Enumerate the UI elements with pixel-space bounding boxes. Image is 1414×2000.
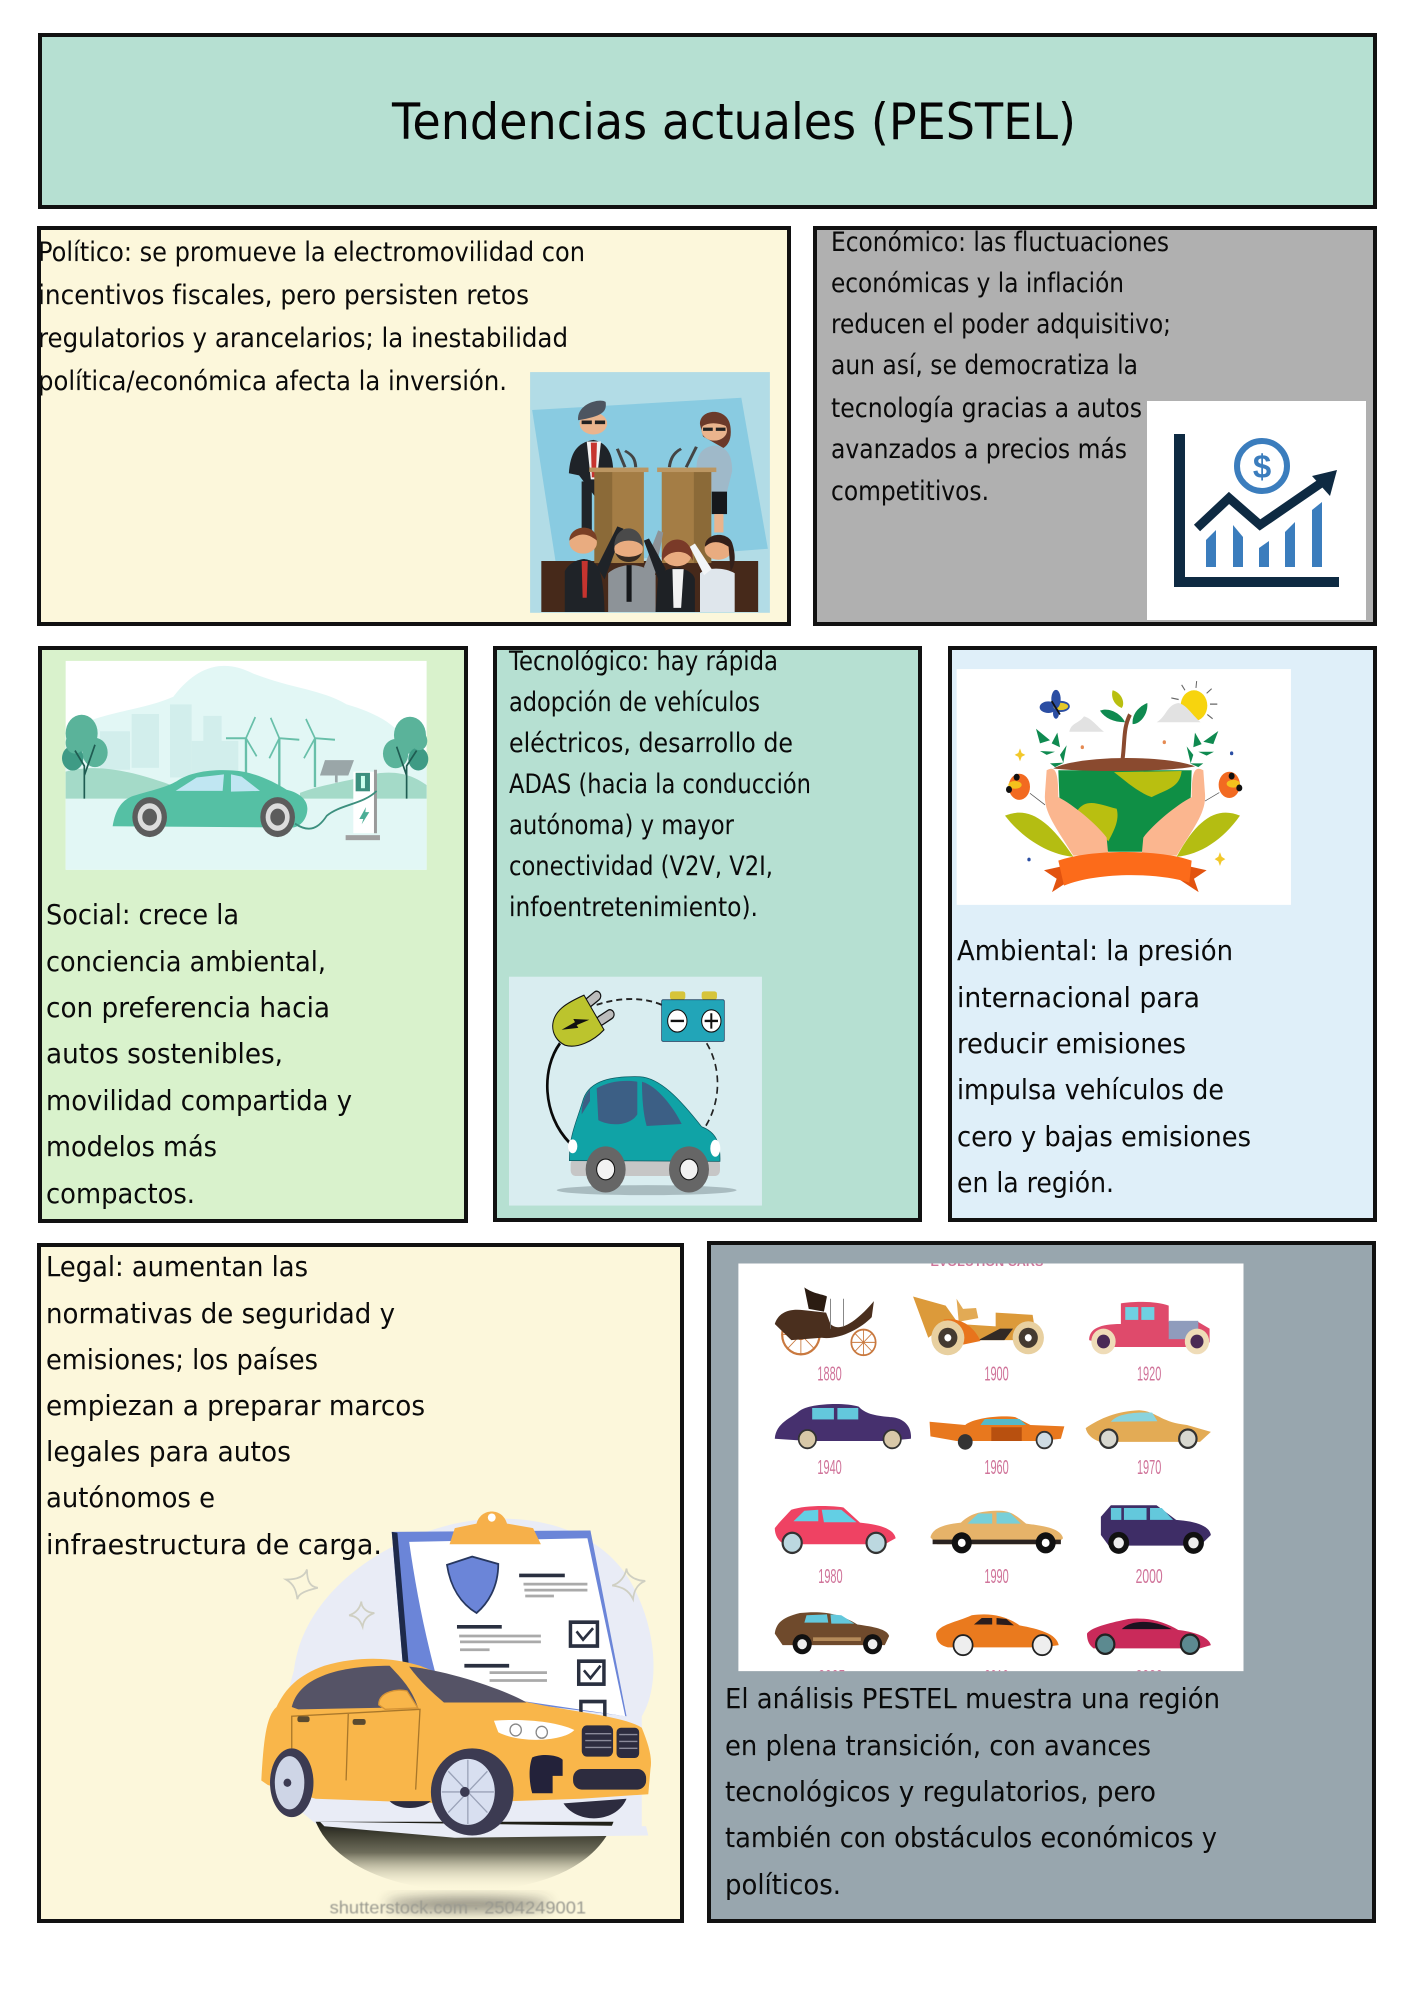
hands [1045,769,1108,856]
text: ambiental: en la región. [957,1166,1114,1199]
branches [1036,729,1218,767]
text: tecnológico: conectividad (V2V, V2I, [509,851,773,882]
woman speaker [696,412,732,532]
year labels: 2020 [1136,1667,1163,1689]
text: social: autos sostenibles, [46,1037,283,1070]
text: legal: Legal: aumentan las [46,1250,308,1283]
text: político: regulatorios y arancelarios; la inestabilidad [38,323,568,354]
text: legal: infraestructura de carga. [46,1528,382,1561]
panel: ambiental [950,648,1375,1220]
car 1920 [1089,1302,1210,1354]
illustration: evolution of cars [738,1256,1244,1689]
podiums [589,447,716,563]
watermark: shutterstock.com · 2504249001 [330,1898,586,1918]
illustration: politicians at podiums [530,372,770,613]
text: social: Social: crece la [46,898,239,931]
year labels: 1980 [818,1566,843,1588]
car [557,1077,737,1195]
butterfly [1040,690,1069,719]
plug [553,995,610,1046]
headlight and grille [494,1720,574,1740]
panel: económico [815,227,1375,624]
icon: growth chart with dollar coin: $ [1253,448,1271,485]
text: tecnológico: autónoma) y mayor [509,810,735,841]
text: tecnológico: adopción de vehículos [509,687,760,718]
lavender blob [263,1519,654,1835]
year labels: 2000 [1136,1566,1163,1588]
illustration: hands holding the earth [957,669,1291,905]
text: social: movilidad compartida y [46,1084,352,1117]
text: conclusión: en plena transición, con avances [725,1729,1151,1762]
text: tecnológico: eléctricos, desarrollo de [509,728,793,759]
panel: conclusión [709,1243,1374,1921]
year labels [817,1363,1163,1689]
text: social: con preferencia hacia [46,991,330,1024]
battery [662,991,724,1041]
text: social [46,898,352,1210]
car 2000 [1101,1505,1211,1554]
text: conclusión: tecnológicos y regulatorios, pero [725,1775,1156,1808]
text: tecnológico: infoentretenimiento). [509,892,758,923]
panel: tecnológico [495,646,920,1220]
year labels: 2005 [818,1667,845,1689]
year labels: 1920 [1137,1363,1161,1386]
text: legal: autónomos e [46,1481,215,1514]
illustration: plug, battery and electric car [509,977,762,1206]
text: conclusión: políticos. [725,1868,841,1901]
shadow [316,1822,614,1891]
text: económico: avanzados a precios más [831,434,1127,465]
text: conclusión [725,1682,1220,1901]
year labels: 1960 [984,1457,1009,1479]
illustration: checklist and yellow car [261,1512,654,1918]
charging station [295,770,380,840]
car 1900 [913,1297,1044,1355]
text: tecnológico: ADAS (hacia la conducción [509,769,811,800]
text: social: modelos más [46,1130,217,1163]
sparkles [286,1569,645,1627]
text: legal [46,1250,425,1561]
car 1940 [775,1404,911,1448]
text: político [38,237,585,397]
text: económico: económicas y la inflación [831,268,1124,299]
panel: político [38,228,789,624]
crowd [565,526,735,612]
flowers [1006,772,1242,805]
text: social: conciencia ambiental, [46,945,326,978]
text: económico: tecnología gracias a autos [831,393,1142,424]
text: legal: legales para autos [46,1435,291,1468]
text: económico: Económico: las fluctuaciones [831,227,1169,258]
car 2020 [1087,1618,1211,1654]
year labels: 1970 [1137,1457,1161,1479]
text: legal: emisiones; los países [46,1343,318,1376]
year labels: 1880 [817,1363,842,1386]
year labels: 1900 [984,1363,1009,1386]
car 1990 [930,1511,1063,1553]
text: social: compactos. [46,1177,195,1210]
sapling [1100,690,1147,759]
car [113,770,307,837]
year labels: 2010 [984,1667,1009,1689]
big leaves [1005,813,1240,857]
car 1970 [1086,1410,1211,1448]
title: Tendencias actuales (PESTEL) [391,93,1076,151]
text: conclusión: El análisis PESTEL muestra una región [725,1682,1220,1715]
text: tecnológico: Tecnológico: hay rápida [508,646,778,677]
text: económico: reducen el poder adquisitivo; [831,309,1171,340]
car 2010 [936,1614,1059,1655]
globe [1058,770,1192,852]
text: político: Político: se promueve la electromovilidad con [38,237,585,268]
clipboard [392,1512,627,1720]
car 1880 [775,1287,876,1355]
text: ambiental: Ambiental: la presión [957,934,1233,967]
year labels: 1940 [817,1457,842,1479]
ribbon [1044,852,1207,892]
icon: growth chart with dollar coin [1147,401,1366,620]
sun and clouds [1069,681,1217,732]
sparkles [1015,748,1225,866]
text: ambiental: impulsa vehículos de [957,1073,1224,1106]
car 1980 [775,1506,896,1553]
panel: legal [39,1245,682,1921]
text: ambiental [957,934,1251,1199]
text: ambiental: internacional para [957,981,1200,1014]
man speaker [569,401,613,530]
wind turbines [226,717,335,787]
car 1960 [930,1416,1064,1450]
panel: social [40,648,466,1221]
illustration: electric car charging [62,661,428,870]
text: ambiental: reducir emisiones [957,1027,1186,1060]
panel: title [40,35,1376,207]
text: económico: competitivos. [831,476,989,507]
under car ground [320,1822,648,1838]
car 2005 [775,1612,889,1654]
year labels: 1990 [984,1566,1009,1588]
text: político: política/económica afecta la inversión. [38,366,507,397]
text: económico [831,227,1171,507]
text: político: incentivos fiscales, pero persisten retos [38,280,529,311]
text: ambiental: cero y bajas emisiones [957,1120,1251,1153]
text: tecnológico [508,646,811,923]
illustration: evolution of cars: EVOLUTION CARS [930,1256,1044,1269]
trees [62,715,428,799]
text: legal: normativas de seguridad y [46,1297,395,1330]
text: legal: empiezan a preparar marcos [46,1389,425,1422]
text: económico: aun así, se democratiza la [831,350,1138,381]
wheels [390,1799,627,1818]
text: conclusión: también con obstáculos económicos y [725,1821,1217,1854]
car [261,1659,651,1835]
